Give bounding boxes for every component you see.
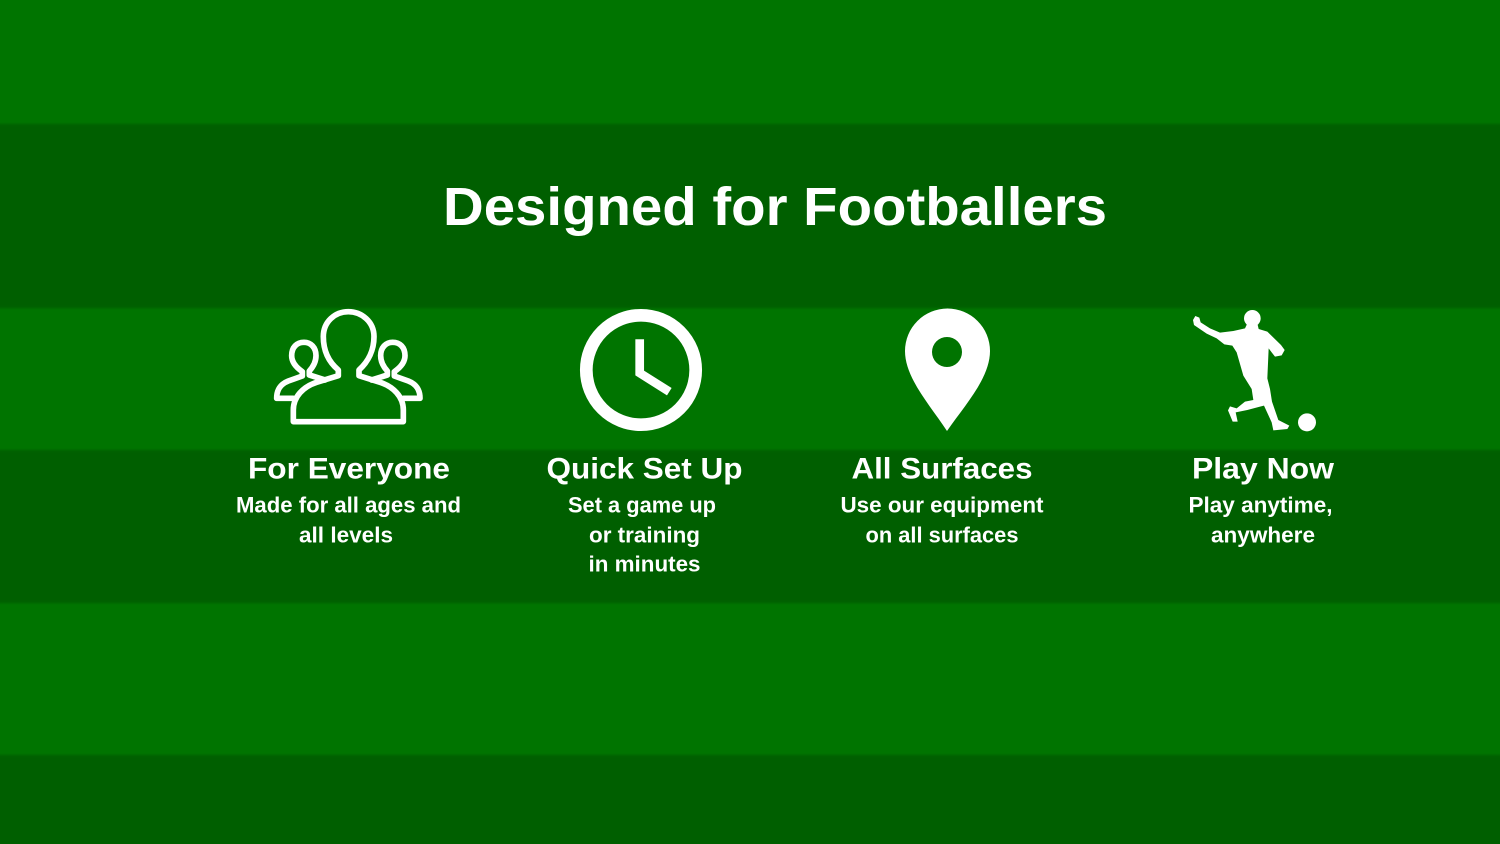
text: quick set up description: in minutes [588,552,700,576]
icon: footballer kicking ball [1193,310,1316,431]
panel: all surfaces [840,308,1044,548]
text: for everyone description: all levels [299,522,393,548]
heading: all surfaces: All Surfaces [852,452,1032,486]
text: all surfaces description: on all surfaces [866,522,1018,548]
panel: for everyone [236,312,461,548]
panel: play now [1188,310,1335,548]
text: for everyone description: Made for all ages and [236,492,461,518]
text: all surfaces description [840,492,1044,548]
icon: group of people [277,312,420,422]
text: quick set up description [568,492,716,576]
icon: clock [586,315,696,425]
text: play now description: Play anytime, [1188,492,1332,518]
text: quick set up description: or training [589,522,700,548]
text: for everyone description [236,492,461,548]
text: play now description: anywhere [1211,522,1315,548]
heading: for everyone: For Everyone [248,452,450,486]
heading: quick set up: Quick Set Up [546,452,742,486]
text: quick set up description: Set a game up [568,492,716,518]
icon: location pin [905,308,990,431]
title: Designed for Footballers [443,177,1107,237]
text: all surfaces description: Use our equipment [840,492,1044,518]
heading: play now: Play Now [1192,452,1335,486]
panel: quick set up [546,315,742,576]
text: play now description [1188,492,1332,548]
